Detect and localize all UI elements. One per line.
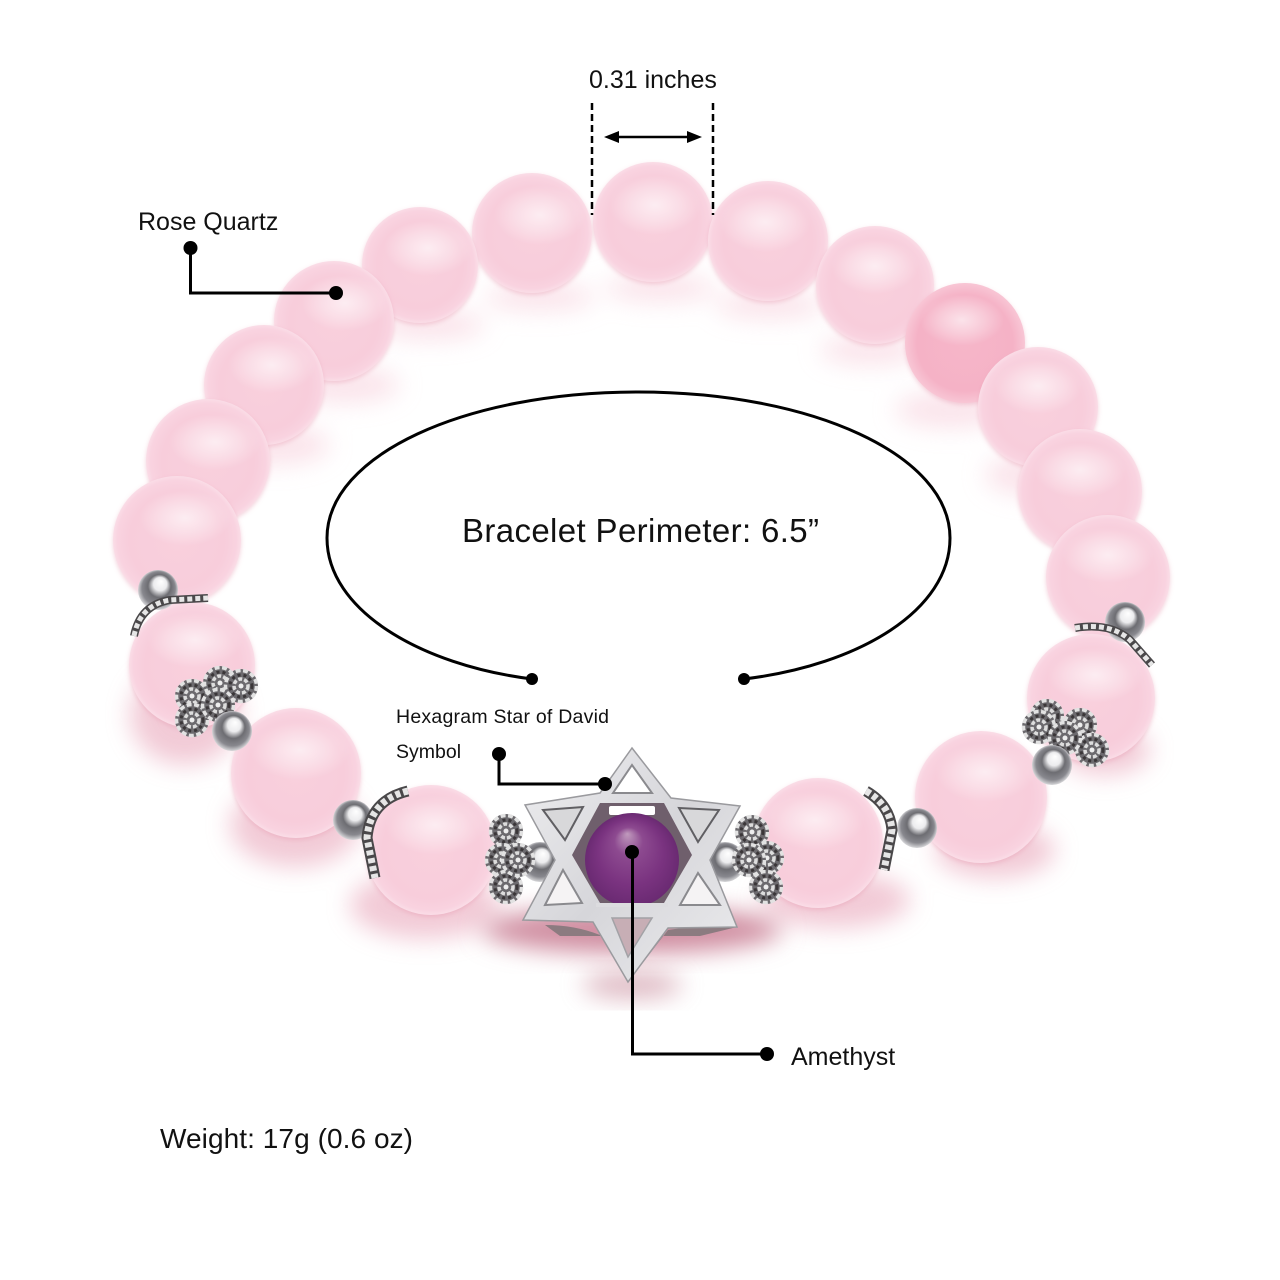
callout: amethyst [625, 845, 895, 1071]
perimeter loop with label: Bracelet Perimeter: 6.5” [462, 512, 819, 549]
silver spacers and filigree caps [134, 570, 1152, 904]
weight text: Weight: 17g (0.6 oz) [160, 1123, 413, 1154]
perimeter loop with label [327, 392, 950, 685]
label: bead width: 0.31 inches [589, 66, 717, 94]
callout: hexagram star [396, 706, 612, 791]
callout: rose quartz: Rose Quartz [138, 208, 278, 236]
callout: rose quartz [138, 208, 343, 300]
bead shadows [130, 274, 1150, 999]
callout: hexagram star: Symbol [396, 741, 461, 763]
rose quartz beads [113, 162, 1170, 915]
callout: hexagram star: Hexagram Star of David [396, 706, 609, 728]
dimension: bead width [589, 66, 717, 215]
callout: amethyst: Amethyst [791, 1043, 895, 1071]
star of David pendant [523, 748, 740, 982]
